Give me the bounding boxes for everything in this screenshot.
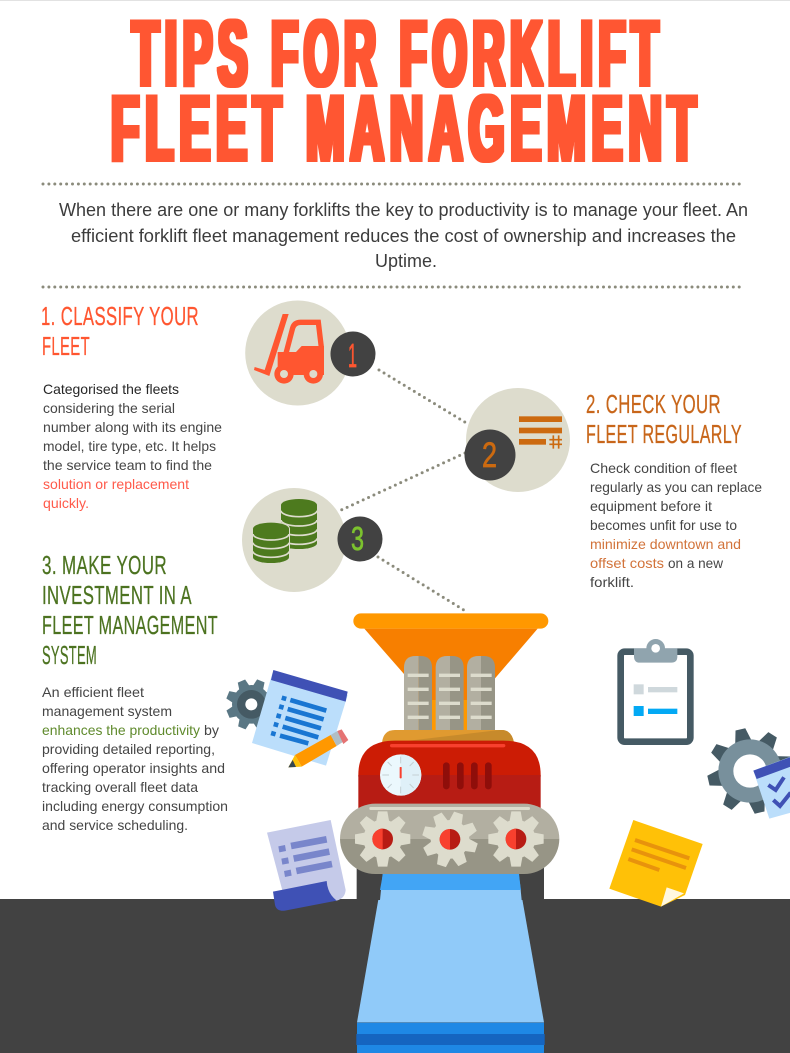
text: step 2 body: forklift. [590, 574, 634, 590]
tan cap [382, 730, 514, 743]
gear right [488, 811, 544, 867]
text: step 1 body: quickly. [43, 495, 89, 511]
three pipes [404, 656, 495, 730]
text: step 1 body: solution or replacement [43, 476, 189, 492]
text: step 2 body: offset costs [590, 555, 664, 571]
text: step 2 body: becomes unfit for use to [590, 517, 737, 533]
icon: large gear with checklist [691, 712, 790, 830]
icon: list circle with badge 2: 2 [482, 436, 497, 475]
dark floor band [0, 899, 790, 1053]
text: step 3 body: management system [42, 703, 172, 719]
text: step 1 body: number along with its engine [43, 419, 222, 435]
machine legs [357, 867, 544, 900]
blue outfeed [380, 872, 521, 890]
red engine body [358, 741, 541, 808]
heading: step 3 [42, 550, 218, 670]
panel: step 2 check [586, 389, 762, 590]
panel: step 1 classify [41, 301, 222, 511]
text: step 2 body [590, 460, 762, 590]
icon: forklift circle with badge 1 [245, 300, 376, 406]
text: step 1 body: the service team to find the [43, 457, 212, 473]
gear left [355, 811, 410, 867]
pencil [288, 729, 348, 767]
text: step 2 body: regularly as you can replace [590, 479, 762, 495]
vents [443, 762, 492, 789]
text: step 3 body: and service scheduling. [42, 817, 188, 833]
intro text: When there are one or many forklifts the key to productivity is to manage your fleet. An [59, 200, 748, 220]
text: step 1 body [43, 381, 222, 511]
heading: step 1: 1. CLASSIFY YOUR [41, 301, 199, 331]
conveyor belt [356, 860, 545, 1053]
intro text: efficient forklift fleet management reduces the cost of ownership and increases the [71, 226, 736, 246]
text: step 3 body [42, 684, 228, 833]
text: step 3 body: providing detailed reporting, [42, 741, 215, 757]
small gear [218, 671, 284, 737]
machine [340, 613, 559, 900]
checklist sheet [252, 670, 348, 766]
heading: step 1: FLEET [42, 331, 90, 361]
text: step 2 body: Check condition of fleet [590, 460, 737, 476]
icon: list circle with badge 2 [464, 388, 570, 492]
heading: step 1 [41, 301, 199, 361]
text: step 3 body: by [204, 722, 219, 738]
heading: step 2 [586, 389, 742, 449]
text: step 1 body: model, tire type, etc. It helps [43, 438, 216, 454]
gauge [380, 754, 421, 796]
gear middle [415, 804, 485, 874]
heading: step 3: INVESTMENT IN A [42, 580, 192, 610]
heading: step 2: 2. CHECK YOUR [586, 389, 721, 419]
dotted connectors [337, 370, 468, 612]
icon: coin stacks circle with badge 3: 3 [351, 520, 364, 557]
icon: sticky note [609, 820, 703, 907]
intro text [59, 200, 748, 271]
icon: curled paper document [267, 820, 346, 911]
icon: clipboard [621, 639, 690, 742]
heading: step 3: 3. MAKE YOUR [42, 550, 167, 580]
text: step 1 body: considering the serial [43, 400, 175, 416]
intro text: Uptime. [375, 251, 437, 271]
heading: step 3: SYSTEM [42, 640, 97, 670]
heading: step 3: FLEET MANAGEMENT [42, 610, 218, 640]
text: step 3 body: including energy consumption [42, 798, 228, 814]
panel: step 3 invest [42, 550, 228, 833]
text: step 3 body: offering operator insights and [42, 760, 225, 776]
icon: forklift circle with badge 1: 1 [348, 337, 357, 374]
gear track [340, 804, 559, 874]
text: step 2 body: on a new [668, 555, 724, 571]
title [111, 1, 702, 181]
icon: document, gear and pencil [218, 670, 348, 767]
hopper funnel [353, 613, 548, 732]
text: step 3 body: tracking overall fleet data [42, 779, 198, 795]
text: step 1 body: Categorised the fleets [43, 381, 179, 397]
text: step 3 body: enhances the productivity [42, 722, 200, 738]
text: step 2 body: equipment before it [590, 498, 712, 514]
icon: coin stacks circle with badge 3 [242, 488, 382, 592]
text: step 2 body: minimize downtown and [590, 536, 741, 552]
text: step 3 body: An efficient fleet [42, 684, 144, 700]
